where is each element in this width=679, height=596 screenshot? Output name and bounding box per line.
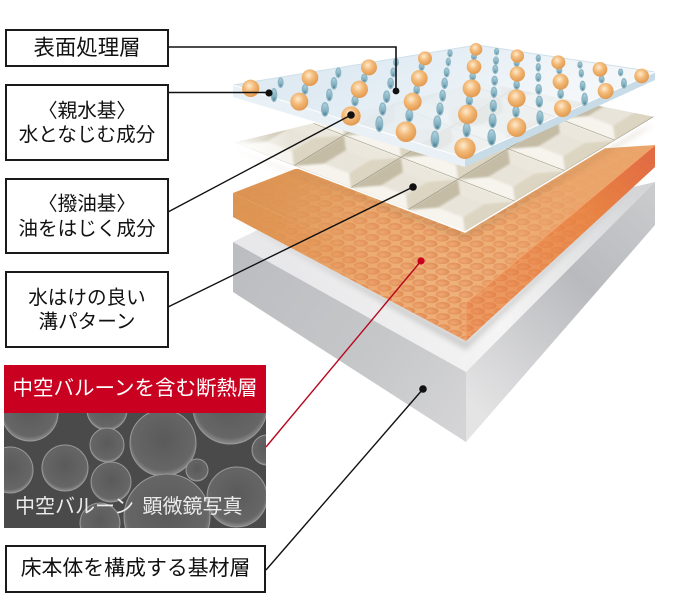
label: base material layer: 床本体を構成する基材層	[21, 557, 250, 580]
surface treatment layer	[233, 43, 655, 167]
label: water-shedding groove pattern: 水はけの良い	[28, 286, 146, 308]
label: oil-repellent group: 〈撥油基〉	[38, 193, 136, 215]
leader: surface treatment layer	[168, 47, 399, 94]
label: hydrophilic group: 水となじむ成分	[19, 124, 155, 146]
label: oil-repellent group	[5, 178, 169, 254]
leader: groove pattern	[168, 183, 417, 307]
base material layer	[233, 167, 655, 442]
leader: oil-repellent group	[168, 111, 355, 212]
oil-repellent groups	[242, 43, 649, 159]
heading: insulation layer	[4, 365, 266, 413]
heading: insulation layer: 中空バルーンを含む断熱層	[12, 377, 257, 400]
label: hydrophilic group: 〈親水基〉	[38, 100, 136, 122]
leader: base material	[266, 385, 427, 570]
hydrophilic groups	[271, 49, 626, 147]
groove pattern layer	[234, 86, 654, 240]
caption: micrograph: 中空バルーン 顕微鏡写真	[15, 496, 243, 518]
label: oil-repellent group: 油をはじく成分	[18, 218, 156, 240]
micrograph of hollow balloons	[4, 413, 266, 528]
leader: hydrophilic group	[168, 89, 273, 97]
insulation layer with hollow balloons	[233, 145, 655, 341]
label: surface treatment layer: 表面処理層	[34, 36, 140, 60]
label: water-shedding groove pattern	[5, 271, 169, 348]
label: base material layer	[5, 545, 266, 593]
label: hydrophilic group	[5, 84, 169, 161]
label: surface treatment layer	[5, 29, 169, 67]
leader: insulation layer	[266, 257, 425, 447]
label: water-shedding groove pattern: 溝パターン	[38, 311, 136, 333]
